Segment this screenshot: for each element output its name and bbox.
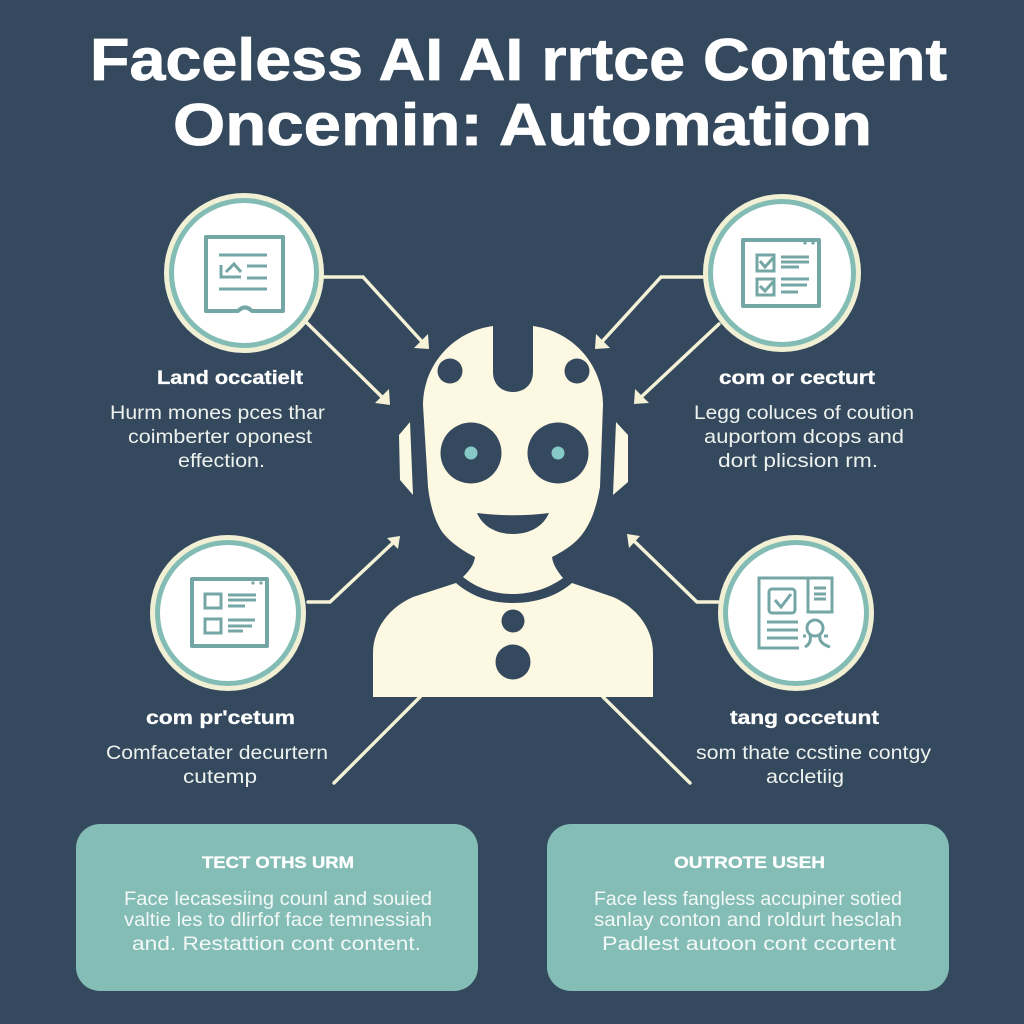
heading: bottom left info box: TECT OTHS URM <box>202 853 354 872</box>
text: bottom right info box body: Face less fangless accupiner sotied <box>594 889 902 910</box>
robot head <box>423 326 603 594</box>
text: bottom right description: accletiig <box>766 766 844 788</box>
text: bottom left description: cutemp <box>183 766 257 788</box>
line: bottom right leg <box>603 697 690 783</box>
text: bottom left info box body: Face lecasesiing counl and souied <box>124 889 432 910</box>
icon: checklist window <box>743 240 819 306</box>
robot eye left <box>440 422 502 484</box>
arrow: bottom left connector <box>308 536 400 602</box>
text: top right description: auportom dcops and <box>704 426 904 448</box>
text: top right heading: com or cecturt <box>719 368 876 389</box>
panel: bottom right circle icon <box>718 535 874 691</box>
robot ear right <box>613 422 628 495</box>
panel: bottom left circle icon <box>150 535 306 691</box>
text: bottom left description <box>106 742 328 788</box>
text: bottom right info box body <box>594 889 902 955</box>
panel: bottom left info box <box>76 824 478 991</box>
text: bottom left info box body: valtie les to dlirfof face temnessiah <box>124 910 432 931</box>
arrow: top left upper connector <box>322 277 429 349</box>
robot figure <box>373 326 653 697</box>
text: bottom right heading: tang occetunt <box>730 708 880 729</box>
panel: top right circle icon <box>703 194 861 352</box>
line: bottom left leg <box>334 697 420 783</box>
arrow: top left lower connector <box>307 323 390 405</box>
text: top left description: coimberter oponest <box>128 426 313 448</box>
text: bottom right description: som thate ccstine contgy <box>696 742 931 764</box>
panel: top left circle icon <box>164 193 324 353</box>
text: bottom right info box body: Padlest autoon cont ccortent <box>602 934 897 955</box>
text: top right description: dort plicsion rm. <box>718 450 878 472</box>
arrow: top right lower connector <box>634 324 719 404</box>
text: bottom left description: Comfacetater decurtern <box>106 742 328 764</box>
robot ear left <box>399 422 413 495</box>
text: top right description <box>694 402 914 472</box>
text: top right description: Legg coluces of coution <box>694 402 914 424</box>
text: bottom right description <box>696 742 931 788</box>
icon: form window <box>192 579 267 646</box>
robot eye right <box>528 422 588 484</box>
text: bottom left info box body <box>124 889 432 955</box>
heading: bottom right info box: OUTROTE USEH <box>674 853 825 872</box>
icon: document with chart <box>206 237 283 311</box>
arrow: bottom right connector <box>627 534 718 602</box>
panel: bottom right info box <box>547 824 949 991</box>
arrow: top right upper connector <box>595 277 703 349</box>
icon: certificate documents <box>759 578 832 648</box>
text: bottom right info box body: sanlay conton and roldurt hesclah <box>594 910 902 931</box>
text: bottom left info box body: and. Restattion cont content. <box>132 934 421 955</box>
text: top left heading: Land occatielt <box>157 368 304 389</box>
title <box>90 27 947 158</box>
text: top left description <box>110 402 326 472</box>
title: Faceless AI AI rrtce Content <box>90 27 947 93</box>
text: top left description: Hurm mones pces thar <box>110 402 326 424</box>
robot body <box>373 583 653 697</box>
title: Oncemin: Automation <box>173 92 872 158</box>
robot buttons <box>496 610 530 680</box>
text: bottom left heading: com pr'cetum <box>146 708 295 729</box>
robot head dots <box>438 358 590 384</box>
robot smile <box>477 513 549 534</box>
text: top left description: effection. <box>178 450 265 472</box>
